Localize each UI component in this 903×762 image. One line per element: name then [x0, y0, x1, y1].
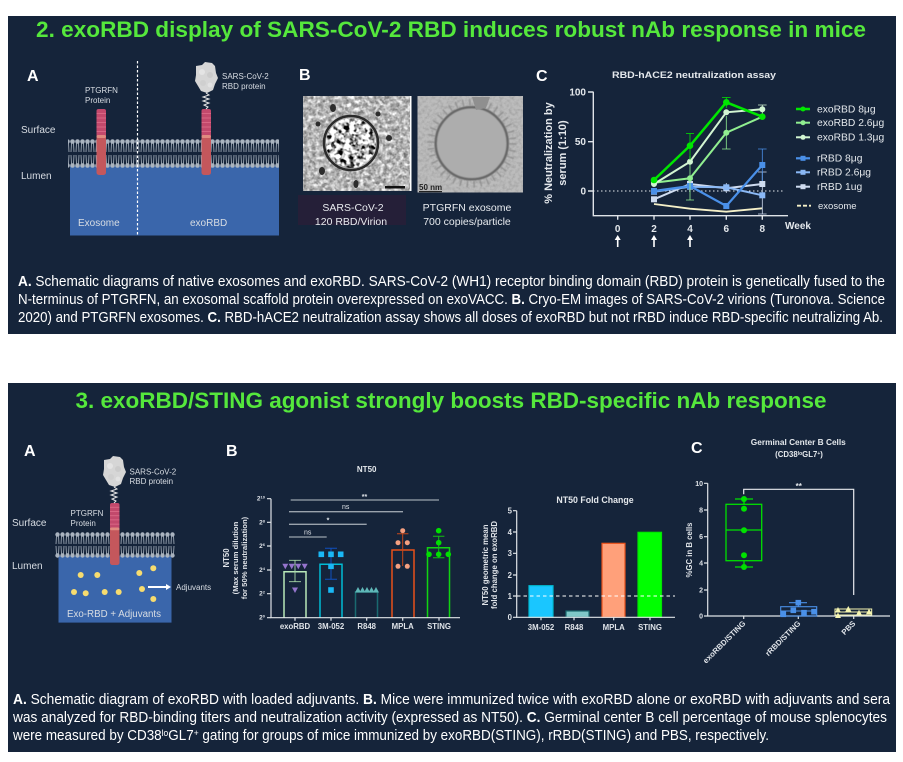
points: R848 — [355, 587, 379, 592]
caption: section 3: + — [194, 728, 199, 739]
category labels: STING — [638, 623, 662, 632]
axis tick labels: 4 — [263, 566, 266, 571]
series: rRBD 2.6ug — [652, 184, 765, 198]
labels: Surface — [21, 125, 56, 136]
axis category labels: MPLA — [392, 622, 414, 631]
series: exoRBD 8ug — [651, 98, 765, 183]
y axis title — [222, 516, 249, 599]
tick labels: 0 — [508, 613, 513, 622]
labels: Surface — [12, 518, 47, 529]
axis tick labels: 6 — [263, 542, 266, 547]
axes — [704, 483, 890, 619]
labels: RBD protein — [222, 82, 266, 91]
panel: section 2 exoRBD display — [8, 16, 896, 334]
axis category labels: 3M-052 — [318, 622, 345, 631]
protein: PTGRFN — [110, 503, 120, 565]
labels: SARS-CoV-2 — [130, 468, 177, 476]
box: rRBD/STING — [780, 600, 817, 617]
category labels: R848 — [565, 623, 584, 632]
axes — [513, 511, 675, 620]
axis tick labels: 2 — [259, 519, 263, 526]
title: section 3: 3. exoRBD/STING agonist strongly boosts RBD-specific nAb response — [76, 388, 826, 413]
caption: section 3 — [12, 691, 891, 744]
points: exoRBD — [282, 560, 308, 593]
legend: exoRBD 8μg — [817, 104, 876, 116]
tick labels: 4 — [699, 560, 703, 568]
significance labels: ns — [304, 530, 312, 536]
series: rRBD 8ug — [652, 149, 767, 208]
chart title: NT50 Fold Change — [556, 495, 634, 505]
axis tick labels: 2 — [257, 496, 261, 502]
lumen block — [58, 556, 172, 623]
axis labels: 8 — [760, 224, 766, 235]
tick labels: 6 — [699, 534, 703, 541]
bars — [284, 548, 450, 618]
panel C: germinal center box plot: C — [691, 440, 703, 457]
significance labels: * — [327, 518, 330, 524]
reference line at 1 — [517, 595, 675, 597]
chart title: (CD38 — [775, 450, 798, 459]
tick labels: 2 — [699, 588, 703, 594]
caption: section 3: gating for groups of mice immunized by exoRBD(STING), rRBD(STING) and PBS, respectively. — [199, 727, 769, 744]
caption: section 2 — [18, 273, 885, 326]
image: SARS-CoV-2 virion — [303, 96, 412, 191]
panel B: NT50 bar chart: B — [226, 443, 238, 460]
y axis title: %GC in B cells — [685, 522, 694, 578]
labels: PTGRFN — [85, 86, 118, 95]
tick labels: 3 — [508, 549, 513, 558]
caption: section 3: was analyzed for RBD-binding titers and neutralization activity (expressed as NT50). C. Germinal center B cell percentage of mouse splenocytes — [12, 709, 887, 726]
labels: Protein — [85, 96, 110, 105]
dashed divider — [136, 61, 138, 235]
caption: SARS-CoV-2: SARS-CoV-2 — [322, 202, 384, 214]
bars — [529, 532, 662, 617]
tick labels — [695, 481, 703, 620]
y axis title: NT50 geometric mean — [481, 524, 490, 606]
significance bracket — [744, 489, 854, 595]
axis tick labels: 2 — [263, 590, 266, 595]
chart title — [751, 437, 846, 459]
labels: SARS-CoV-2 — [222, 72, 269, 81]
box: PBS — [835, 606, 872, 618]
significance labels: ** — [362, 494, 367, 501]
zero line — [593, 190, 785, 192]
category labels: exoRBD/STING — [701, 619, 747, 665]
tick labels: 10 — [695, 481, 703, 488]
labels — [12, 468, 211, 620]
tick labels: 4 — [508, 528, 513, 537]
axis tick labels: 2 — [259, 543, 263, 550]
axis tick labels: 2 — [259, 591, 263, 598]
caption: section 3: lo — [162, 728, 168, 739]
axis category labels: R848 — [357, 622, 377, 631]
protein: PTGRFN left — [96, 109, 106, 175]
axis labels: 4 — [687, 224, 693, 235]
panel: section 3 exoRBD/STING — [8, 383, 896, 752]
series: exoRBD 2.6ug — [652, 116, 762, 200]
axis labels: 50 — [575, 137, 586, 148]
axis labels: 6 — [724, 224, 730, 235]
tick labels: 0 — [699, 614, 703, 620]
significance label: ** — [796, 482, 803, 491]
y axis title: NT50 — [222, 548, 231, 568]
category labels — [528, 623, 662, 632]
caption: section 2: N-terminus of PTGRFN, an exosomal scaffold protein overexpressed on exoVACC. B. Cryo-EM images of SARS-CoV-2 virions (Turonova. Science — [18, 291, 885, 308]
points: STING — [426, 528, 451, 558]
axes — [267, 499, 460, 621]
adjuvant dots — [71, 565, 156, 602]
arrow: adjuvants release — [148, 584, 171, 590]
y axis title: fold change on exoRBD — [490, 521, 499, 609]
panel B: cryo-EM images — [298, 67, 523, 228]
panel B: cryo-EM images: B — [299, 67, 311, 84]
dosing arrows — [615, 235, 693, 247]
chart title: Germinal Center B Cells — [751, 437, 846, 447]
chart title: ) — [820, 450, 823, 459]
y axis title: for 50% neutralization) — [240, 516, 249, 599]
category labels: PBS — [840, 619, 857, 637]
axis labels: 0 — [615, 224, 621, 235]
axis labels: 100 — [569, 88, 586, 98]
axis category labels: STING — [427, 622, 451, 631]
image: PTGRFN exosome — [418, 96, 523, 192]
series: exoRBD 1.3ug — [652, 105, 767, 186]
points: 3M-052 — [318, 548, 344, 593]
significance labels: ns — [342, 504, 350, 511]
axis labels: Week — [785, 221, 811, 232]
axis labels — [543, 88, 811, 235]
y axis title — [481, 521, 499, 609]
lipid membrane — [55, 532, 175, 558]
axis labels: serum (1:10) — [557, 120, 569, 186]
labels: Lumen — [21, 171, 52, 182]
category labels: rRBD/STING — [764, 619, 802, 658]
chart: NT50 fold change — [481, 495, 675, 632]
panel B: NT50 bar chart — [222, 443, 460, 631]
labels: RBD protein — [130, 477, 173, 486]
panel A: loaded exosome schematic: A — [24, 443, 36, 460]
tick labels: 2 — [508, 571, 513, 580]
legend: exosome — [818, 201, 857, 212]
panel C: germinal center box plot — [685, 437, 890, 665]
labels: Lumen — [12, 561, 43, 572]
chart title: RBD-hACE2 neutralization assay — [612, 70, 776, 80]
caption: section 3: GL7 — [168, 727, 194, 744]
legend: rRBD 2.6μg — [817, 168, 871, 178]
y axis title: (Max serum dilution — [231, 521, 240, 594]
category labels — [701, 619, 857, 665]
title: section 2: 2. exoRBD display of SARS-CoV-2 RBD induces robust nAb response in mice — [36, 17, 866, 42]
axis tick labels: 2 — [259, 615, 263, 622]
category labels: 3M-052 — [528, 623, 555, 632]
caption: SARS-CoV-2: 120 RBD/Virion — [315, 216, 387, 228]
panel A: exosome schematic: A — [27, 68, 39, 85]
labels: Protein — [70, 519, 96, 528]
legend: rRBD 8μg — [817, 154, 863, 164]
panel A: loaded exosome schematic — [12, 443, 211, 623]
panel C: neutralization line chart: C — [536, 68, 548, 85]
labels: exoRBD — [190, 218, 227, 229]
series: exosome — [654, 204, 762, 212]
lumen block — [70, 166, 279, 236]
axis category labels: exoRBD — [280, 622, 311, 631]
axis labels: 0 — [580, 186, 586, 198]
axis tick labels: 10 — [261, 494, 266, 500]
axis tick labels: 2 — [259, 567, 263, 574]
axis labels: 2 — [651, 224, 657, 235]
axis tick labels — [257, 494, 266, 622]
box: exoRBD/STING — [726, 496, 762, 570]
caption: section 3: were measured by CD38 — [13, 727, 179, 744]
axis labels: % Neutralization by — [543, 101, 555, 204]
chart title: NT50 — [357, 465, 377, 474]
lipid membrane — [68, 139, 279, 168]
legend: exoRBD 1.3μg — [817, 132, 884, 144]
significance bars — [289, 500, 439, 537]
chart title: GL7 — [802, 450, 817, 459]
axes — [588, 92, 788, 220]
icon: RBD protein — [103, 456, 126, 503]
image: PTGRFN exosome: 50 nm — [419, 183, 442, 192]
points: MPLA — [396, 528, 410, 569]
protein: PTGRFN right with RBD — [202, 109, 211, 175]
tick labels — [508, 506, 513, 622]
caption: SARS-CoV-2: 700 copies/particle — [423, 216, 511, 228]
icon: RBD protein — [195, 62, 218, 109]
labels: Exo-RBD + Adjuvants — [67, 609, 161, 620]
chart title: lo — [798, 451, 802, 457]
tick labels: 1 — [508, 592, 513, 601]
significance labels — [304, 494, 367, 536]
caption: SARS-CoV-2 — [298, 195, 512, 228]
axis category labels — [280, 622, 451, 631]
labels — [21, 72, 269, 229]
labels: Exosome — [78, 218, 120, 229]
category labels: MPLA — [603, 623, 625, 632]
tick labels: 8 — [699, 508, 703, 514]
panel A: exosome schematic — [21, 61, 279, 236]
labels: PTGRFN — [70, 509, 104, 518]
legend — [796, 104, 884, 212]
panel C: neutralization line chart — [536, 68, 884, 247]
caption: SARS-CoV-2: PTGRFN exosome — [423, 202, 512, 214]
tick labels: 5 — [508, 506, 513, 516]
labels: Adjuvants — [176, 583, 211, 592]
chart title: + — [817, 451, 820, 457]
legend: rRBD 1ug — [817, 182, 862, 193]
series: rRBD 1ug — [652, 172, 767, 214]
legend: exoRBD 2.6μg — [817, 118, 884, 129]
axis tick labels: 0 — [263, 614, 266, 619]
axis tick labels: 8 — [263, 518, 266, 523]
